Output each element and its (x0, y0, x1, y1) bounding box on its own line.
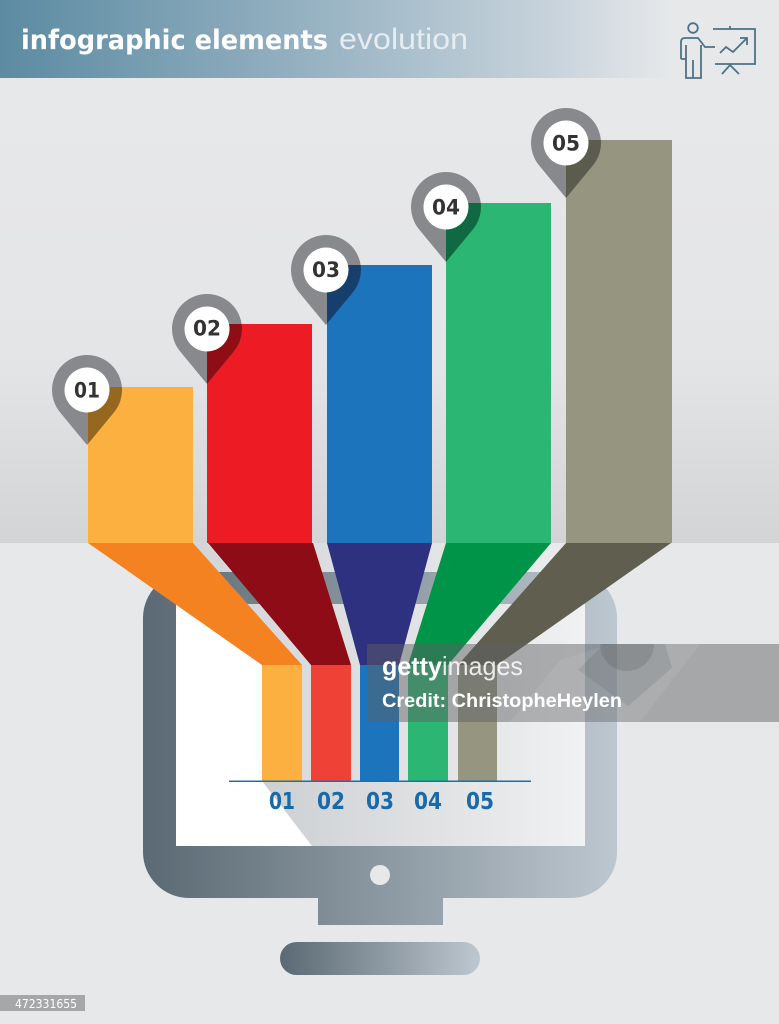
subtitle: evolution (339, 23, 468, 56)
pin 05 (531, 108, 601, 198)
baseline (229, 780, 531, 782)
bar 04 (408, 203, 551, 781)
header banner (0, 0, 779, 78)
chart long shadow (262, 604, 585, 846)
pin 01 (52, 355, 122, 445)
bottom labels: 03 (366, 789, 394, 815)
bottom labels: 02 (317, 789, 345, 815)
monitor (143, 572, 617, 975)
bars group (88, 140, 672, 781)
pin 03 (291, 235, 361, 325)
monitor stand base (280, 942, 480, 975)
bottom labels: 01 (269, 789, 295, 815)
watermark logo: gettyimages (382, 651, 523, 681)
bezel seen through the gaps (219, 572, 540, 604)
funnel gap strips (193, 543, 566, 781)
bar 02 (207, 324, 351, 781)
image id tag: 472331655 (15, 996, 77, 1011)
pin 02: 02 (193, 316, 221, 340)
title: infographic elements (21, 25, 328, 56)
bar 05 (458, 140, 672, 781)
monitor screen (176, 604, 585, 846)
bottom labels: 04 (414, 789, 442, 815)
watermark (367, 644, 779, 722)
bottom labels: 05 (466, 789, 494, 815)
icon: presenter with chart (681, 23, 755, 78)
pin 02 (172, 294, 242, 384)
monitor bezel (143, 572, 617, 898)
bar 01 (88, 387, 302, 781)
pin 03: 03 (312, 258, 340, 282)
watermark credit: Credit: ChristopheHeylen (382, 691, 622, 712)
pin 04 (411, 172, 481, 262)
power button (370, 865, 390, 885)
bar 03 (327, 265, 432, 781)
bottom labels (269, 789, 494, 815)
pin 01: 01 (74, 378, 100, 402)
pin 05: 05 (552, 132, 580, 156)
monitor stand neck (318, 890, 443, 925)
pin 04: 04 (432, 196, 460, 220)
